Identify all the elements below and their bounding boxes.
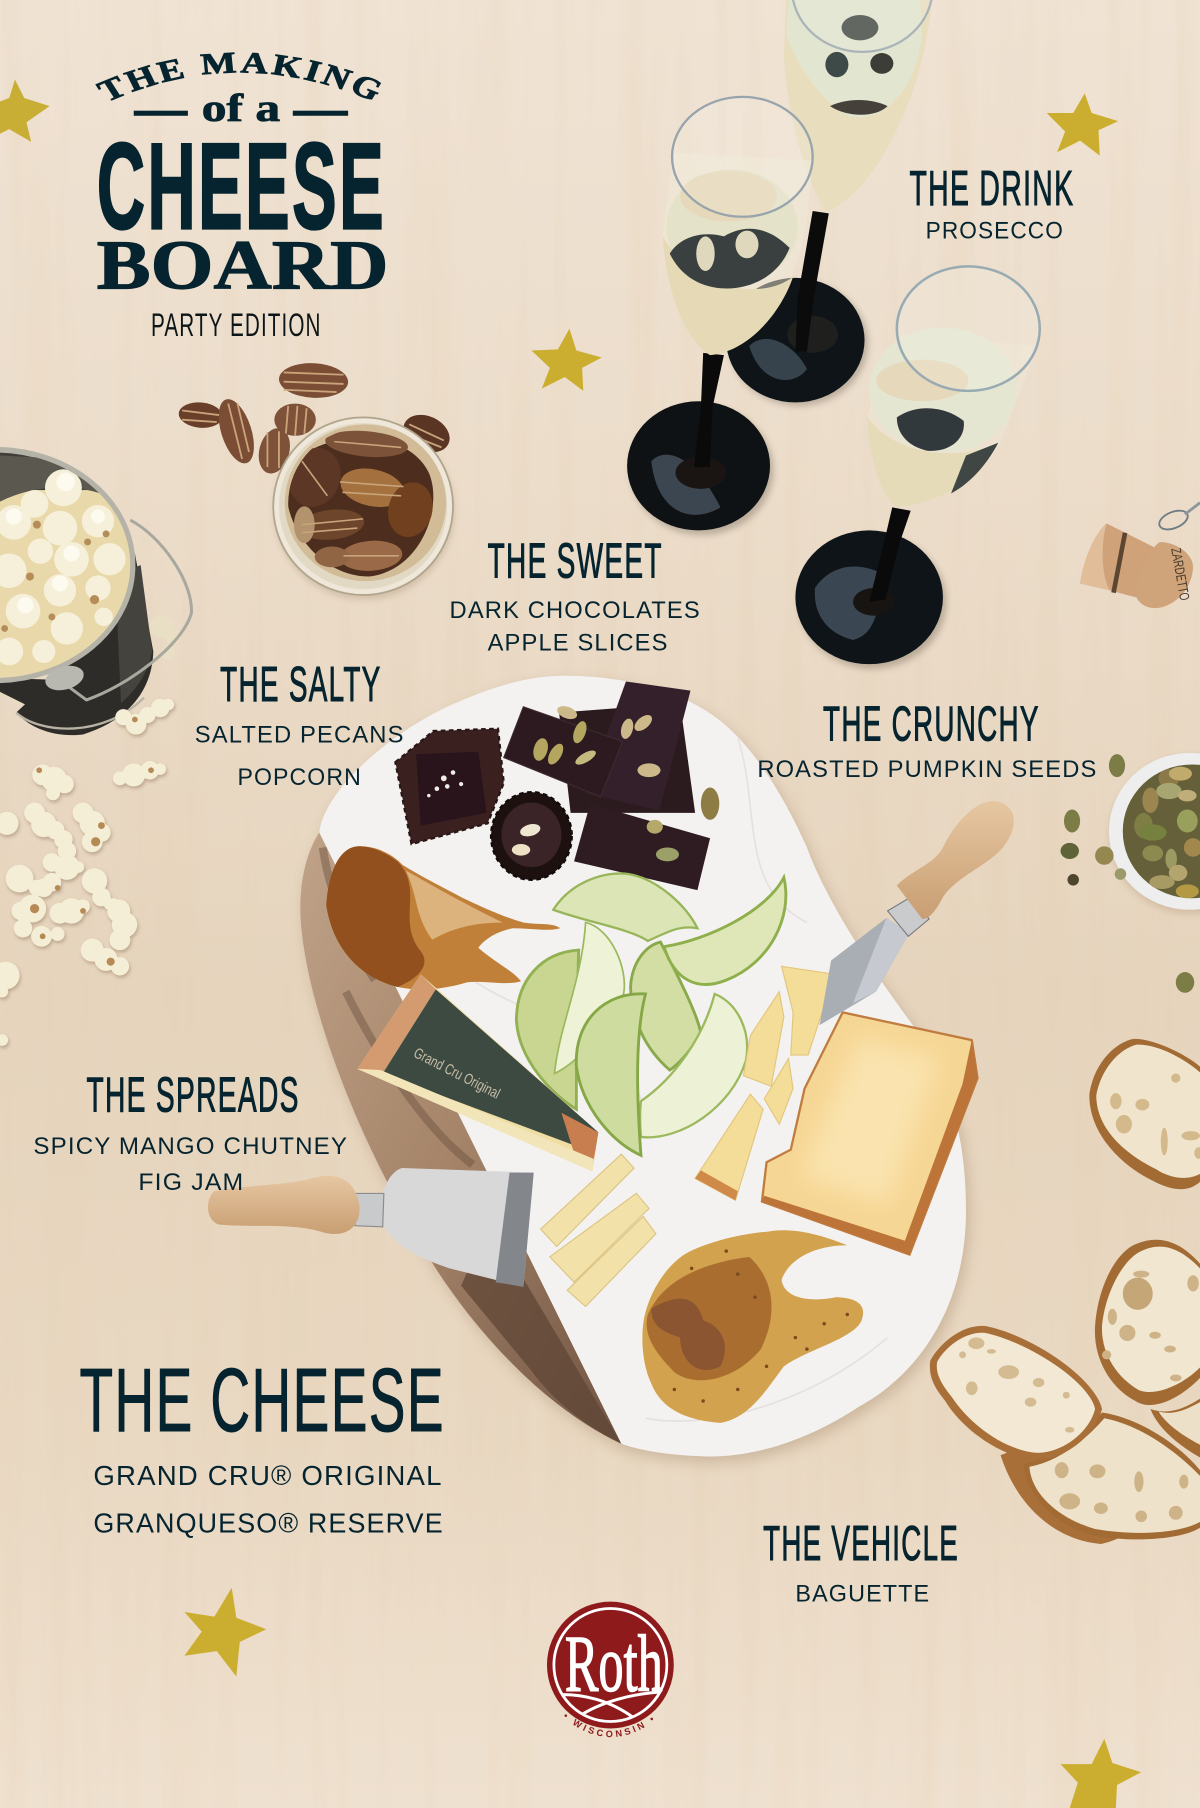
cork <box>1080 503 1200 608</box>
title: cheese: CHEESE <box>97 117 386 254</box>
label: the spreads: SPICY MANGO CHUTNEY <box>33 1133 348 1160</box>
glass: front center flute <box>627 97 813 535</box>
popcorn by bucket <box>150 615 181 660</box>
pumpkin seeds on chocolate <box>531 704 719 861</box>
label: the crunchy <box>757 695 1097 783</box>
cheese pieces <box>695 966 835 1200</box>
board marble <box>319 676 966 1457</box>
knife: lower left <box>208 1168 534 1287</box>
loose pecans <box>178 361 456 477</box>
pumpkin seed bowl <box>1061 753 1200 993</box>
label: the crunchy: THE CRUNCHY <box>823 695 1040 751</box>
cork brand: ZARDETTO <box>1168 547 1193 602</box>
popcorn bucket <box>0 447 191 735</box>
title: the making: THE MAKING <box>95 52 382 101</box>
baguette slices <box>930 1039 1200 1544</box>
chutney spread <box>326 846 560 989</box>
popcorn in bucket <box>0 455 135 680</box>
star: bottom left <box>184 1588 266 1677</box>
label: the cheese: GRANQUESO® RESERVE <box>93 1507 444 1538</box>
slice mid right <box>1095 1240 1200 1405</box>
title: board: BOARD <box>97 226 388 304</box>
slice lower center <box>1001 1412 1200 1544</box>
star: top right <box>1047 93 1118 156</box>
title lockup <box>95 52 388 343</box>
label: the salty: THE SALTY <box>220 656 382 712</box>
label: the vehicle: THE VEHICLE <box>763 1515 959 1571</box>
chocolate bars <box>504 681 719 890</box>
wedge label: Grand Cru Original <box>411 1045 503 1103</box>
label: the salty <box>195 656 405 791</box>
title: of a: of a <box>202 87 280 130</box>
scattered popcorn <box>0 699 174 1046</box>
knife: upper right <box>820 801 1014 1025</box>
cheese board <box>300 676 969 1462</box>
roth logo: • WISCONSIN • <box>564 1714 653 1738</box>
star: top left <box>0 80 50 142</box>
label: the drink: PROSECCO <box>926 218 1064 245</box>
fig jam spread <box>642 1230 863 1423</box>
large cheese <box>762 1012 978 1255</box>
bucket handle <box>69 520 191 700</box>
label: the sweet: APPLE SLICES <box>488 629 669 656</box>
pecan jar <box>273 417 454 600</box>
label: the drink: THE DRINK <box>910 160 1074 216</box>
chocolate truffle <box>491 792 572 880</box>
loose seeds <box>1061 754 1194 993</box>
salted caramel truffle <box>395 729 504 844</box>
label: the sweet: DARK CHOCOLATES <box>450 597 701 624</box>
roth logo: Roth <box>565 1619 663 1708</box>
label: the drink <box>910 160 1074 245</box>
roth logo <box>547 1602 674 1738</box>
title: party edition: PARTY EDITION <box>151 307 322 343</box>
title: of a <box>134 87 348 130</box>
glass: right flute <box>795 266 1040 669</box>
label: the sweet: THE SWEET <box>488 533 663 589</box>
cheese sticks <box>541 1154 656 1306</box>
glass: back flute <box>726 0 933 406</box>
label: the spreads: THE SPREADS <box>86 1067 300 1123</box>
label: the sweet <box>450 533 701 656</box>
board wood segment <box>300 833 621 1444</box>
granqueso wedge and pieces <box>541 966 978 1306</box>
label: the salty: SALTED PECANS <box>195 722 405 749</box>
label: the spreads <box>33 1067 348 1196</box>
slice upper right <box>1089 1039 1200 1189</box>
label: the vehicle: BAGUETTE <box>795 1581 930 1608</box>
label: the cheese <box>80 1351 445 1538</box>
label: the cheese: GRAND CRU® ORIGINAL <box>93 1460 443 1491</box>
slice lower left <box>930 1326 1102 1460</box>
star: center <box>531 329 602 391</box>
grand cru wedge <box>357 974 598 1172</box>
label: the salty: POPCORN <box>237 764 362 791</box>
label: the cheese: THE CHEESE <box>80 1351 445 1451</box>
star: bottom right <box>1061 1739 1141 1808</box>
label: the crunchy: ROASTED PUMPKIN SEEDS <box>757 756 1097 783</box>
label: the spreads: FIG JAM <box>138 1169 244 1196</box>
label: the vehicle <box>763 1515 959 1608</box>
apple slices <box>516 873 786 1155</box>
slice lower far right <box>1150 1399 1200 1457</box>
salted pecans <box>178 361 456 600</box>
